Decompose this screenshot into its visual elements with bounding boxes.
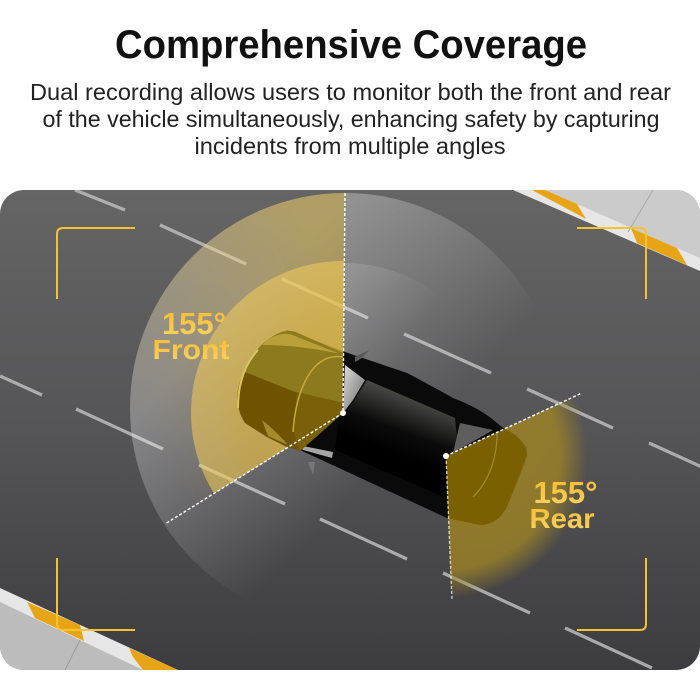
description text: of the vehicle simultaneously, enhancing safety by capturing <box>42 106 660 132</box>
pivot dots <box>340 410 449 459</box>
description text <box>30 79 671 159</box>
coverage circles <box>130 193 517 583</box>
rear glass <box>453 423 493 453</box>
description text: incidents from multiple angles <box>194 133 506 159</box>
label: 155 rear <box>531 482 596 528</box>
panel: road scene <box>0 190 700 670</box>
label: 155 rear: 155° <box>533 475 598 510</box>
car body <box>262 330 527 518</box>
curb: top right <box>513 190 700 271</box>
title: Comprehensive Coverage <box>115 23 587 67</box>
side mirrors <box>355 350 369 362</box>
label: 155 front <box>154 312 230 360</box>
rear coverage wedge <box>446 399 584 594</box>
curb: bottom left <box>0 588 178 670</box>
corner brackets <box>57 228 646 630</box>
label: 155 front: 155° <box>162 306 226 341</box>
dashed sector edges <box>165 193 582 600</box>
label: 155 front: Front <box>152 334 230 365</box>
description text: Dual recording allows users to monitor both the front and rear <box>30 79 671 105</box>
hood under front wedge <box>237 331 343 451</box>
label: 155 rear: Rear <box>530 503 595 534</box>
roof <box>335 380 458 498</box>
car <box>262 330 527 518</box>
rear bumper <box>446 428 527 525</box>
front coverage wedge <box>144 193 345 493</box>
lane markings <box>0 190 700 668</box>
windshield glass <box>343 365 365 413</box>
road surface <box>0 190 700 670</box>
